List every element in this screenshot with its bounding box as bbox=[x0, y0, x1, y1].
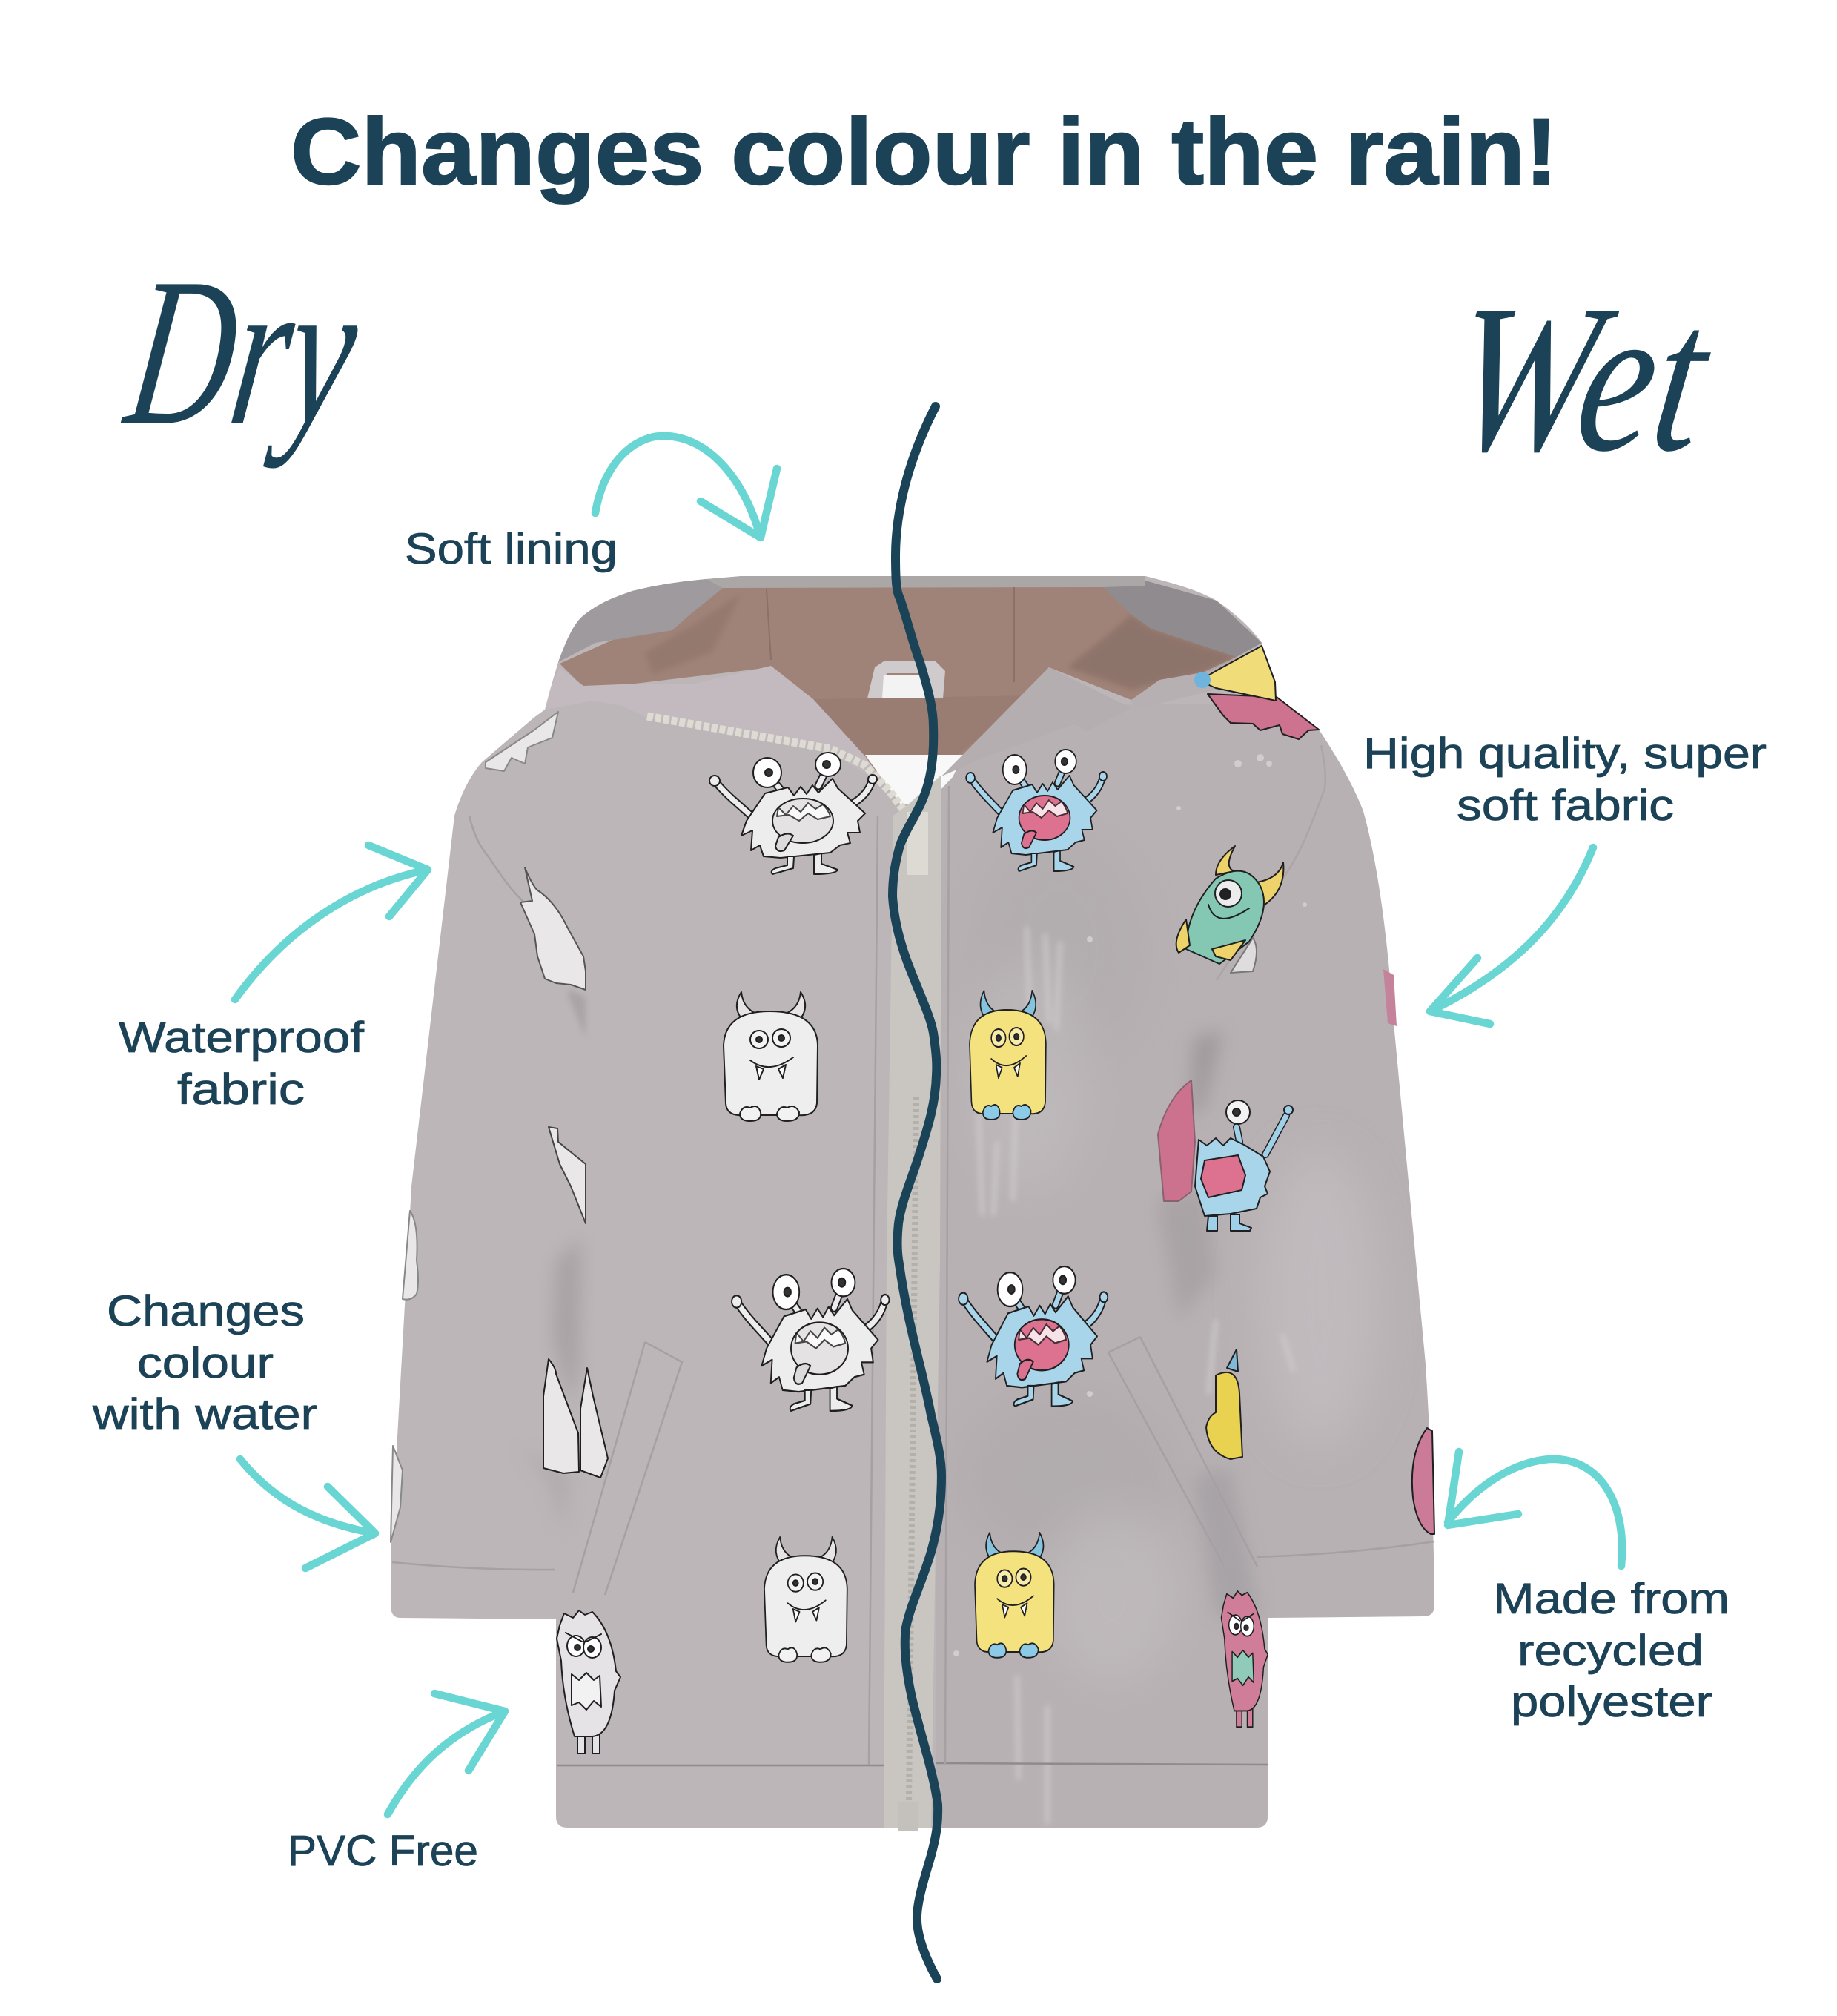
lining seam lines bbox=[767, 587, 1014, 682]
right lapel bbox=[941, 667, 1131, 776]
hood top band bbox=[706, 576, 1145, 588]
jacket body shell bbox=[391, 576, 1434, 1828]
arrow bbox=[1448, 1452, 1622, 1566]
hood rim grey band right bbox=[1103, 581, 1262, 657]
hanger loop bbox=[867, 661, 945, 698]
monster: wet yellow block upper bbox=[970, 991, 1046, 1120]
monster: dry fuzzy top bbox=[709, 753, 877, 874]
label: recycled bbox=[1517, 1627, 1704, 1675]
monster: wet yellow side bbox=[1206, 1349, 1242, 1459]
monster: dry block upper bbox=[724, 992, 818, 1121]
zip tape bbox=[884, 775, 941, 1828]
label: Waterproof bbox=[119, 1014, 365, 1062]
loop interior bbox=[882, 675, 928, 698]
label: PVC Free bbox=[288, 1827, 478, 1875]
callout: soft lining bbox=[405, 436, 777, 573]
monster: wet blue fuzzy top bbox=[966, 750, 1107, 871]
label: colour bbox=[137, 1339, 274, 1387]
right hood front strip bbox=[1131, 672, 1216, 710]
darker side folds in lining bbox=[645, 593, 741, 675]
arrow bbox=[388, 1693, 505, 1814]
lower neck fleece bbox=[813, 695, 1030, 756]
monster: wet yellow block lower bbox=[975, 1533, 1054, 1658]
jacket bbox=[391, 576, 1454, 1839]
zip bottom stop bbox=[898, 1802, 918, 1831]
arrow bbox=[1430, 847, 1593, 1024]
monster: wet pink hairy bbox=[1221, 1591, 1268, 1727]
monster: wet pink and blue pair bbox=[1158, 1080, 1293, 1231]
label: Made from bbox=[1493, 1575, 1730, 1623]
callout: pvc free bbox=[288, 1693, 505, 1875]
callout: waterproof fabric bbox=[119, 845, 428, 1114]
monster: dry fuzzy lower bbox=[732, 1269, 890, 1411]
seams and details bbox=[392, 745, 1434, 1765]
label: with water bbox=[92, 1390, 317, 1438]
heading: Dry: Dry bbox=[113, 234, 372, 469]
callout: high quality fabric bbox=[1363, 730, 1767, 1024]
arrow bbox=[240, 1459, 375, 1568]
label: High quality, super bbox=[1363, 730, 1767, 778]
zip puller bbox=[907, 812, 928, 875]
heading: Wet: Wet bbox=[1439, 261, 1727, 495]
callout: made from recycled polyester bbox=[1448, 1452, 1730, 1726]
zip teeth bbox=[909, 1097, 916, 1802]
label: soft fabric bbox=[1457, 781, 1674, 830]
left fold shadows bbox=[568, 991, 586, 1029]
monster: wet green cyclops bbox=[1176, 846, 1283, 973]
arrow bbox=[595, 436, 777, 538]
partial monsters dry side bbox=[391, 712, 608, 1542]
hood monster blue foot bbox=[1194, 672, 1211, 688]
callout: changes colour with water bbox=[92, 1287, 375, 1568]
wavy dry wet divider bbox=[893, 406, 941, 1979]
arrow bbox=[235, 845, 428, 999]
monster: wet pink on right cuff bbox=[1412, 1428, 1434, 1534]
title: Changes colour in the rain! bbox=[291, 99, 1558, 204]
left lapel bbox=[545, 666, 890, 791]
wet side mottling bbox=[519, 704, 1454, 1839]
label: Changes bbox=[107, 1287, 305, 1335]
monster: hood yellow bbox=[1199, 646, 1276, 701]
hood lining: brown behind bbox=[560, 587, 1237, 775]
monster: dry hairy bbox=[557, 1610, 620, 1754]
water droplets bbox=[953, 754, 1307, 1656]
monster: wet sleeve sliver bbox=[1383, 969, 1397, 1026]
monster: dry block lower bbox=[764, 1537, 847, 1662]
neck label bbox=[865, 755, 964, 804]
monster: wet blue fuzzy lower bbox=[959, 1266, 1108, 1407]
label: fabric bbox=[177, 1065, 305, 1114]
left zipper beads bbox=[647, 716, 910, 819]
monster: hood pink bbox=[1208, 694, 1319, 739]
label: polyester bbox=[1511, 1678, 1712, 1726]
label: Soft lining bbox=[405, 525, 618, 573]
hood rim grey band left bbox=[558, 579, 723, 662]
